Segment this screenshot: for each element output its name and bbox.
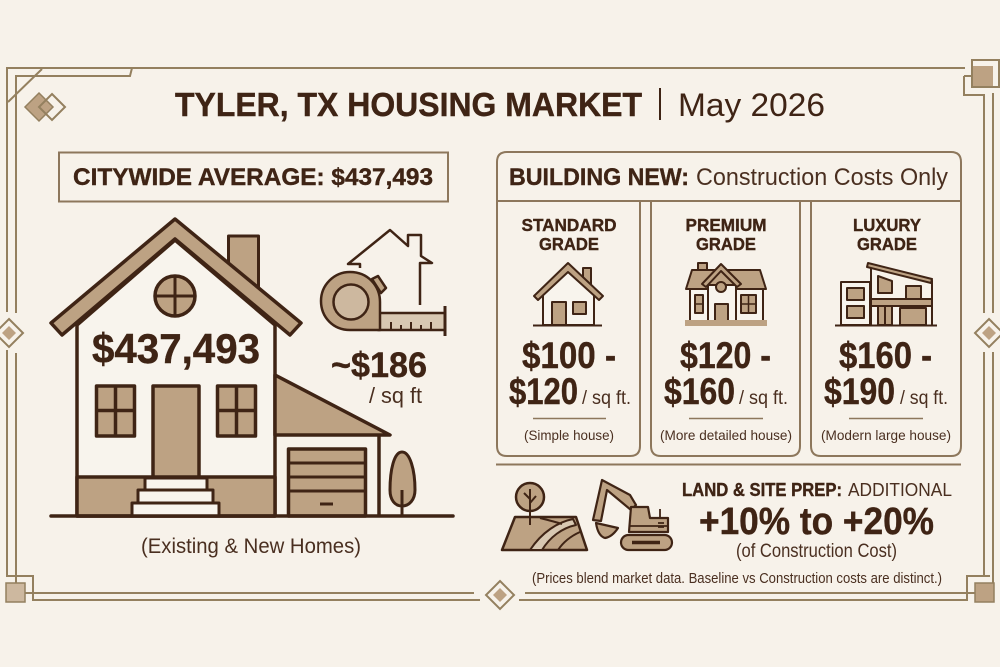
diamond ornament: top left	[25, 93, 65, 121]
card title: STANDARD	[522, 215, 616, 235]
diamond ornament: right	[975, 319, 1000, 347]
panel heading	[509, 164, 948, 191]
corner ornament: bottom left	[6, 583, 25, 602]
panel heading: BUILDING NEW:	[509, 164, 689, 191]
citywide average banner	[59, 152, 448, 202]
card: premium grade	[660, 215, 792, 443]
card: luxury grade	[821, 215, 951, 443]
card title: GRADE	[857, 234, 917, 254]
icon: land with tree	[502, 483, 587, 550]
card title	[686, 215, 766, 254]
foundation	[77, 477, 275, 516]
card title	[853, 215, 921, 254]
land and site prep text: (of Construction Cost)	[736, 541, 897, 562]
card: standard grade	[509, 215, 631, 443]
diamond ornament: bottom	[486, 581, 514, 609]
corner ornament: top right	[972, 60, 999, 87]
tree	[390, 452, 415, 516]
outline house	[348, 230, 432, 305]
price	[824, 335, 948, 412]
icon: excavator	[593, 480, 672, 550]
large house illustration	[51, 219, 453, 516]
roof	[51, 219, 301, 335]
panel heading: Construction Costs Only	[696, 164, 948, 191]
house price: $437,493	[92, 325, 260, 372]
land and site prep text	[682, 479, 952, 562]
garage door	[288, 449, 366, 516]
price: $100 -	[522, 335, 616, 376]
price per square foot: ~$186	[331, 346, 427, 385]
price: $120	[509, 371, 578, 412]
price	[664, 335, 788, 412]
garage roof	[275, 375, 390, 435]
note: (More detailed house)	[660, 427, 792, 443]
price: $190	[824, 371, 895, 412]
title: TYLER, TX HOUSING MARKET	[175, 86, 642, 123]
diamond ornament: left	[0, 319, 23, 347]
card title: GRADE	[696, 234, 756, 254]
caption: existing and new homes: (Existing & New Homes)	[141, 535, 361, 558]
icon: modern house	[835, 263, 937, 326]
price per square foot: / sq ft	[369, 383, 422, 408]
footnote: (Prices blend market data. Baseline vs Construction costs are distinct.)	[532, 571, 942, 587]
card title: GRADE	[539, 234, 599, 254]
tape strip	[378, 306, 445, 336]
land and site prep text: LAND & SITE PREP:	[682, 479, 842, 500]
panel: building new	[497, 152, 961, 456]
title: May 2026	[678, 87, 825, 123]
citywide average banner: CITYWIDE AVERAGE: $437,493	[73, 164, 433, 191]
price: $160 -	[839, 335, 932, 376]
corner ornament: bottom right	[975, 583, 994, 602]
steps	[132, 478, 219, 516]
price	[509, 335, 631, 412]
icon: simple house	[533, 263, 603, 326]
door	[153, 386, 199, 478]
right window	[218, 386, 256, 436]
price: / sq ft.	[900, 388, 948, 409]
note: (Modern large house)	[821, 427, 951, 443]
price per square foot	[331, 346, 427, 408]
price: $160	[664, 371, 735, 412]
note: (Simple house)	[524, 427, 614, 443]
chimney	[228, 236, 258, 292]
price: / sq ft.	[582, 388, 631, 409]
icon: detailed house	[685, 263, 767, 326]
price: / sq ft.	[739, 388, 788, 409]
card title: LUXURY	[853, 215, 921, 235]
round window	[155, 276, 195, 316]
house wall	[77, 240, 275, 516]
panel outline	[497, 152, 961, 456]
garage wall	[377, 435, 381, 516]
left window	[96, 386, 134, 436]
percentage range: +10% to +20%	[699, 501, 934, 543]
card title: PREMIUM	[686, 215, 766, 235]
ground line	[51, 514, 453, 518]
price: $120 -	[680, 335, 771, 376]
land and site prep text: ADDITIONAL	[848, 479, 952, 500]
card title	[522, 215, 616, 254]
tape measure and house icon	[321, 230, 445, 336]
tape case	[321, 272, 386, 330]
